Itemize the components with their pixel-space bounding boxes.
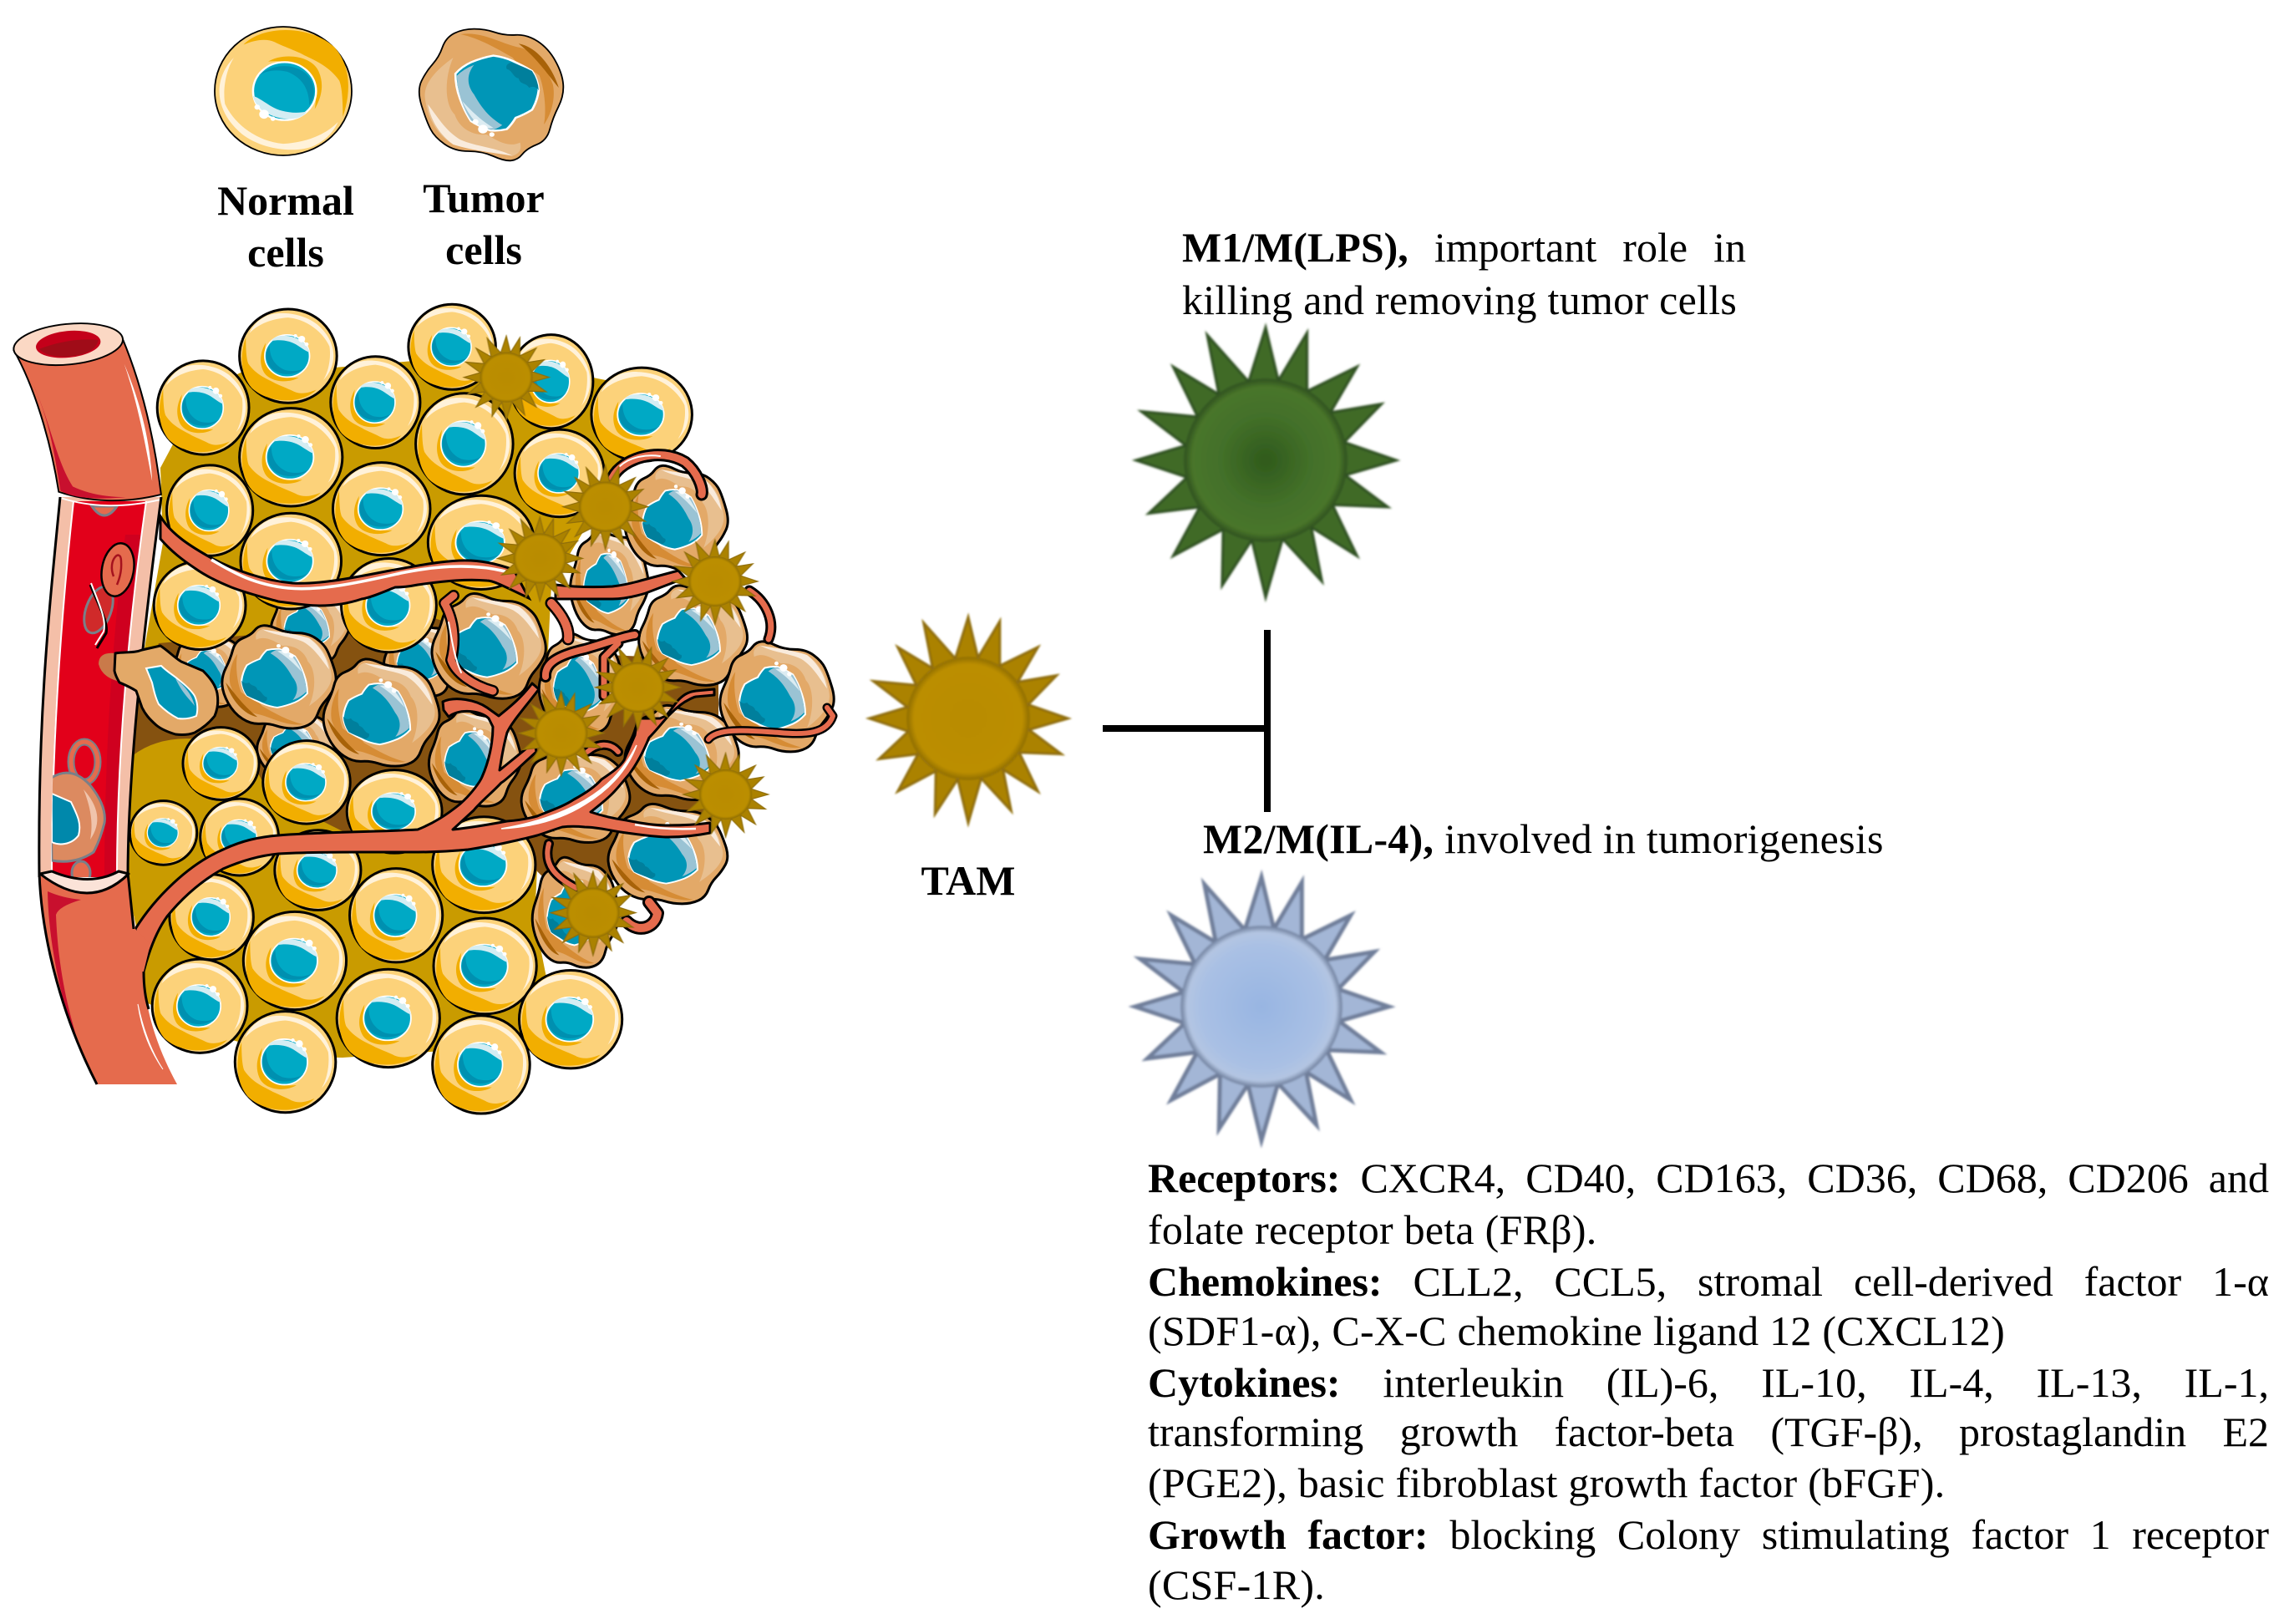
icon: normal cell legend [215,27,352,155]
text: M2 markers [1148,1155,2269,1608]
polarization connector lines [1103,630,1271,812]
text: chemokines [1148,1258,2269,1354]
small TAM 2 [563,465,648,550]
tumor cell cluster [222,465,834,967]
vessel lower tube [39,871,177,1084]
text: receptors: folate receptor beta (FRβ). [1148,1206,1597,1253]
brown stroma [132,618,718,886]
label: TAM: TAM [921,857,1015,904]
text: cytokines: transforming growth factor-beta (TGF-β), prostaglandin E2 [1148,1408,2269,1455]
main blood vessel [12,318,177,1084]
text: M1 description: killing and removing tumor cells [1182,277,1737,323]
text: cytokines: (PGE2), basic fibroblast growth factor (bFGF). [1148,1459,1945,1506]
icon: TAM macrophage [870,617,1068,823]
vessel upper tube [12,318,161,505]
vessel lumen with circulating cells [50,501,146,885]
capillaries [444,455,833,928]
lower branching vessel [135,683,714,972]
text: growth factor: Growth factor: blocking Colony stimulating factor 1 receptor [1148,1511,2269,1558]
label: Normal cells [217,177,354,276]
normal cell cluster [129,304,692,1114]
vessel wall outline [39,497,161,877]
upper branch vessel [160,516,529,606]
text: chemokines: (SDF1-α), C-X-C chemokine ligand 12 (CXCL12) [1148,1307,2005,1354]
small TAM group [464,336,769,956]
text: growth factor [1148,1511,2269,1608]
text: cytokines [1148,1359,2269,1506]
illustration: tumor mass with blood vessel and TAMs [12,304,834,1114]
small TAM 8 [551,871,636,956]
vessel segment beyond TAM [556,571,685,599]
icon: M1 macrophage [1136,327,1396,597]
label: Normal cells: cells [247,229,324,276]
label: Tumor cells [423,175,545,273]
text: M1 description [1182,224,1746,323]
cell clusters [129,304,834,1114]
lower blood cell loop [71,742,98,782]
label: Tumor cells: Tumor [423,175,545,221]
text: growth factor: (CSF-1R). [1148,1561,1325,1608]
text: receptors: Receptors: CXCR4, CD40, CD163, CD36, CD68, CD206 and [1148,1155,2269,1201]
small TAM 1 [464,336,549,420]
vessel wall middle section [39,497,161,877]
tumor cells lying beneath [171,587,460,779]
text: receptors [1148,1155,2269,1253]
grey outlined blood cell [83,586,114,635]
small TAM 5 [596,646,681,730]
text: chemokines: Chemokines: CLL2, CCL5, stromal cell-derived factor 1-α [1148,1258,2269,1305]
cell in lumen top [92,506,117,515]
icon: M2 macrophage [1135,877,1389,1140]
label: Normal cells: Normal [217,177,354,224]
small TAM 4 [672,540,758,624]
background tissue [125,359,668,1058]
tumor cell in lumen [50,773,104,861]
small TAM 6 [519,692,604,776]
text: cytokines: Cytokines: interleukin (IL)-6, IL-10, IL-4, IL-13, IL-1, [1148,1359,2269,1406]
small TAM 7 [683,754,769,837]
bottom blood cell [70,860,92,877]
small TAM 3 [498,517,582,601]
text: M1 description: M1/M(LPS), important role in [1182,224,1746,271]
icon: tumor cell legend [419,29,563,160]
tumor cell entering vessel [99,646,218,735]
text: M2 description: M2/M(IL-4), involved in tumorigenesis [1203,815,1884,862]
label: Tumor cells: cells [445,226,522,273]
blood cell [100,542,135,597]
